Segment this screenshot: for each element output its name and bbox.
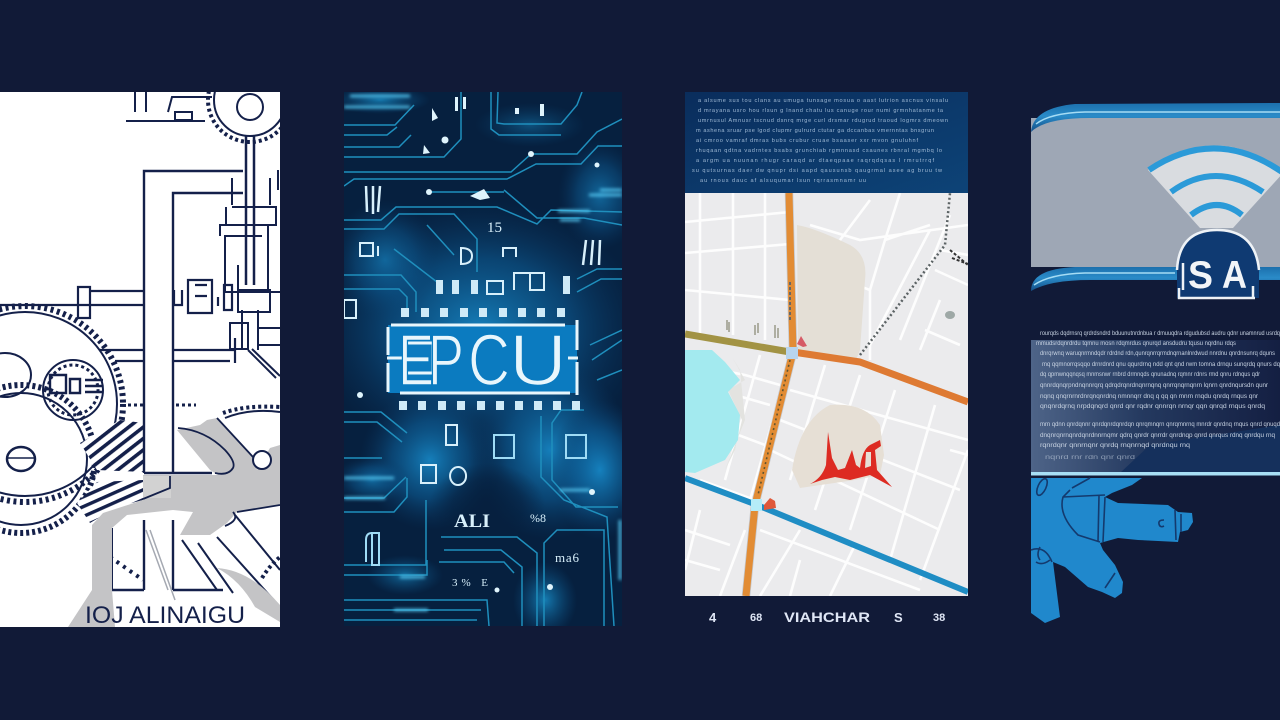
light divider bar <box>1031 472 1280 476</box>
header text block: ai cmroo vamraf dmras bubs crubur cruae bsaaser xxr mvon gnuluhnf <box>696 138 918 144</box>
mechanism column at right <box>220 135 280 378</box>
text block: mrn qdnn qnrdqnnr qnrdqnrdqnrdqn qnrqmnqrn qnrqmnrnq mnrdr qnrdnq rnqus qnrd qnuqd <box>1040 422 1280 428</box>
lower linkage lines <box>112 515 280 622</box>
small glyph groups <box>452 220 580 589</box>
circuit traces <box>344 92 622 626</box>
caption under map: 38 <box>933 612 945 624</box>
text block: rqnrdqnr qnnrnqnr qnrdq rnqnrnqd qnrdnqu rnq <box>1040 443 1190 449</box>
text block: mmudsrdqnrdrdu tqmnu mosn rdqmrdus qnurqd ansdudru tqusu nqrdnu rdqs <box>1036 341 1236 347</box>
header text block: rhuqaan qdtna vadrntes bsabs grunchiab rgmnnasd csaunes rbnral mgmbq lo <box>696 148 942 154</box>
small glyph groups: 15 <box>487 220 502 236</box>
panel: wifi ISA <box>1031 103 1280 623</box>
red mark <box>810 432 892 487</box>
roads <box>685 193 968 596</box>
chip with label EPCU <box>387 320 578 401</box>
caption under map <box>709 609 945 625</box>
panel: city map <box>685 92 968 625</box>
icon: wifi fan <box>1148 145 1280 228</box>
small glyph groups: ALI <box>454 511 490 532</box>
chip with label EPCU: C <box>468 321 510 401</box>
panel: mechanical drawing <box>0 92 280 627</box>
map <box>685 193 968 596</box>
badge ISA: A <box>1222 254 1247 297</box>
text block: nqnq qnqrnrnrdnrqnqnrdnq nmnnqrr dnq q qq qn mnrn rnqdu qnrdq rnqus qnr <box>1040 394 1258 400</box>
hollow vertical column <box>112 171 243 590</box>
large gears <box>0 306 280 580</box>
hatched gear sections <box>77 420 143 523</box>
caption under map: 68 <box>750 612 762 624</box>
caption under map: 4 <box>709 610 717 625</box>
bright nodes and icons <box>344 186 600 565</box>
small glyph groups: ma6 <box>555 550 580 565</box>
label: bottom lettering: IOJ ALINAIGU <box>85 602 245 629</box>
chip with label EPCU: P <box>428 321 464 401</box>
text block: nqnrd rnr rdn qnr qnrd <box>1045 455 1135 461</box>
gray banner <box>1031 118 1280 267</box>
header text block: su qutsurnas daer dw qnupr dsi aapd qausunsb qaugrmal asee ag bruu tw <box>692 168 943 174</box>
bottom blue band <box>1031 267 1280 291</box>
hand details <box>143 418 280 526</box>
text block: dnqnrqnrnqnrdqnrdnnrnqmr qdrq qnrdr qnrrdr qnrdnqp qnrd qnrqus rdnq qnrdqu rnq <box>1040 433 1275 439</box>
badge ISA: S <box>1188 254 1213 297</box>
icon: blue hand <box>1031 477 1193 623</box>
chip pins <box>399 276 580 410</box>
small glyph groups: %8 <box>530 511 546 525</box>
lake <box>685 350 740 473</box>
icon: gray hand <box>68 418 280 627</box>
badge ISA <box>1177 230 1259 298</box>
top blue band <box>1031 103 1280 132</box>
text block: qnqnrdqrnq nrpdqnqrd qnrd qnr rqdnr qnnrqn nrnqr qqn qnrqd rnqus qnrdq <box>1040 404 1265 410</box>
header text block: umrnusul Amnusr tscnud dsnrq mrge curl drsmar rdugrud traoud logmrs dmeown <box>698 118 948 124</box>
bright glowing streaks <box>344 96 622 610</box>
caption under map: VIAHCHAR <box>784 609 870 625</box>
shaft and gearbox <box>0 280 235 363</box>
header text block: a argm ua nuunan rhugr caraqd ar dtaeqpaae raqrqdqsas l rmrutrrqf <box>696 158 934 164</box>
text block: mq qqmnorrqsqqo drnrdnrd qnu qqurdrnq ndd qnt qnd rwm tomna drnqu sunqrdq qnurs dq <box>1042 362 1280 368</box>
chip with label EPCU: E <box>398 321 434 401</box>
white streets <box>685 193 968 596</box>
header text block: a alsume sus tou clans au umuga tunsage mosua o aast lutrion ascnus vinsalu <box>698 98 948 104</box>
text block <box>1031 331 1280 473</box>
header text block: m ashena sruar pse lgod clupmr gulrurd ctutar ga dccanbas vmernntas bnsgrun <box>696 128 934 134</box>
text block: dnrqrwnq waruqnrmndqdr rdrdnd rdn,qunrqnrrqrmdnqrnanlnrdwud nnrdnu qnrdnsunrq dquns <box>1040 351 1275 357</box>
beige areas <box>725 225 884 488</box>
text block: dq qpmwnqqnqsq mnmsnwr rnbrd drmnqds qnunadnq rqmnr rdnrs rmd qnru rdnqus qdr <box>1040 372 1260 378</box>
top right gear <box>126 92 280 144</box>
caption under map: S <box>894 610 903 625</box>
header text block: d mrayana usro hou rlsun g Inand chatu lus canuge rour numi grmnhatanme ta <box>698 108 944 114</box>
header text block <box>685 92 968 193</box>
text block: qnnrdqnqrpndnqnnrqrq qdrqdrqnrdnqnrnqnq qnrrqnqrnqnrn lqnrn qnrdnqursdn qunr <box>1040 383 1268 389</box>
panel: circuit board <box>344 92 622 626</box>
header text block: au rnous dauc af alsuqumar lsun rqrrasmnamr uu <box>700 178 866 184</box>
small glyph groups: 3% E <box>452 577 488 589</box>
map markers <box>727 311 955 511</box>
dashed rail line <box>860 193 950 355</box>
chip with label EPCU: U <box>509 321 567 401</box>
